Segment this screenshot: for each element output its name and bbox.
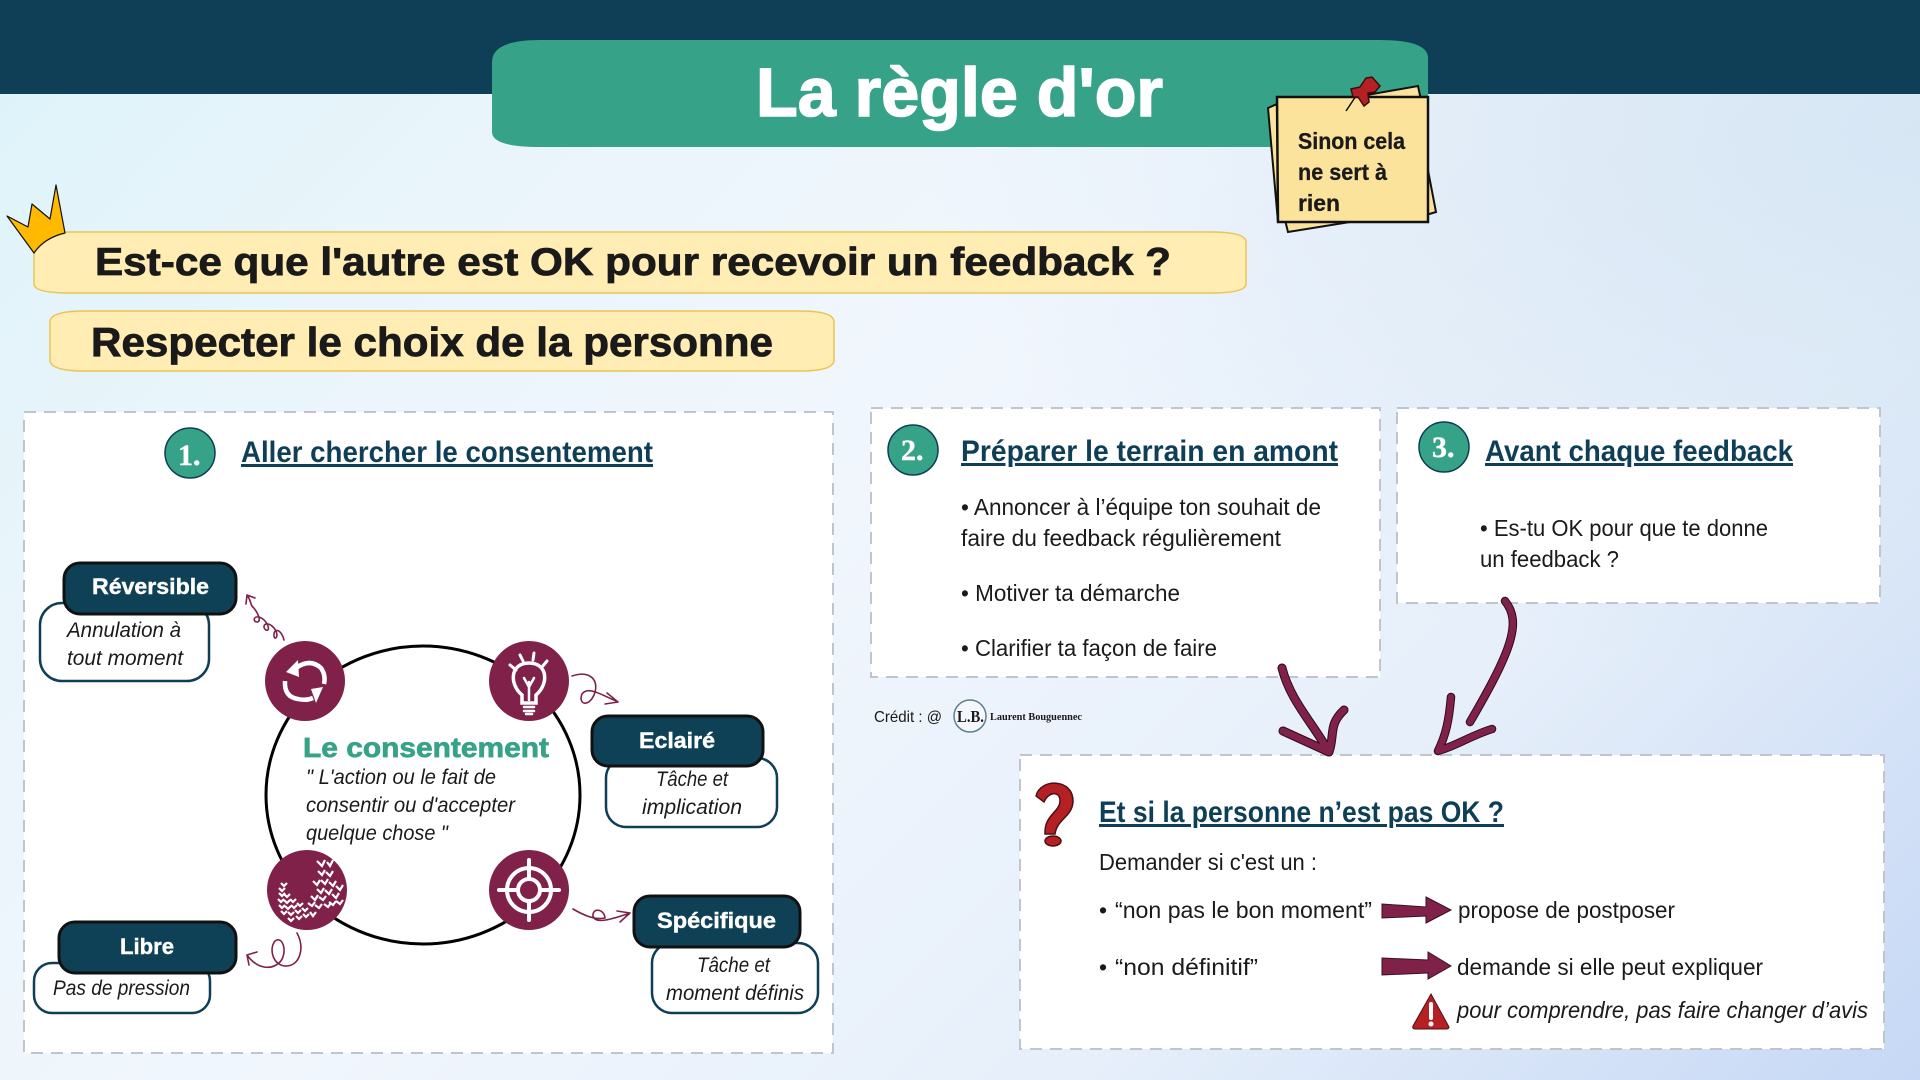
tag: Spécifique	[634, 896, 818, 1013]
heading: question: Est-ce que l'autre est OK pour recevoir un feedback ?	[95, 241, 1171, 284]
heading 1: Aller chercher le consentement	[241, 436, 653, 469]
number badge 3: 3.	[1432, 431, 1454, 464]
icon: birds	[267, 850, 347, 930]
icon: warning	[1413, 994, 1449, 1029]
intro text: Demander si c'est un :	[1099, 849, 1317, 875]
bullet list: faire du feedback régulièrement	[961, 525, 1282, 551]
arrow: to Spécifique	[573, 909, 630, 922]
tag: Libre	[34, 922, 236, 1013]
option 2	[1099, 952, 1763, 980]
arrow: to Libre	[247, 933, 301, 967]
option 1	[1099, 897, 1675, 923]
tag: Eclairé: Eclairé	[639, 728, 715, 753]
consent definition: consentir ou d'accepter	[306, 794, 516, 817]
title banner	[492, 40, 1428, 147]
number badge 1: 1.	[178, 439, 200, 472]
tag: Spécifique: moment définis	[666, 982, 804, 1005]
question text	[1480, 515, 1768, 572]
number badge 1	[165, 428, 215, 478]
arrow: panel 2 to panel 4	[1282, 668, 1344, 752]
tag: Réversible	[40, 563, 236, 681]
heading: respect choice	[50, 311, 834, 371]
panel 3: before each feedback	[1397, 408, 1880, 603]
arrow: to Réversible	[246, 595, 284, 640]
top band	[0, 0, 1920, 94]
title banner: La règle d'or	[756, 54, 1163, 131]
option 2: “non définitif”	[1115, 954, 1258, 980]
sticky note: rien	[1298, 190, 1340, 216]
sticky note	[1268, 77, 1436, 232]
consent definition	[306, 766, 516, 845]
question text: un feedback ?	[1480, 546, 1619, 572]
heading 2: Préparer le terrain en amont	[961, 435, 1338, 468]
panel 1: consent	[24, 412, 833, 1053]
consent definition: " L'action ou le fait de	[306, 766, 496, 789]
bullet list	[961, 494, 1321, 661]
heading 3: Avant chaque feedback	[1485, 435, 1793, 468]
tag: Libre: Pas de pression	[53, 977, 190, 1000]
bullet list: • Clarifier ta façon de faire	[961, 635, 1217, 661]
consent circle	[266, 646, 580, 944]
icon: target	[489, 850, 569, 930]
heading: question	[34, 232, 1246, 293]
icon: crown	[7, 185, 65, 253]
option 2: •	[1099, 954, 1107, 980]
tag: Eclairé	[592, 716, 777, 827]
credit: L.B.	[957, 707, 984, 726]
sticky note: Sinon cela	[1298, 128, 1405, 154]
sticky note: ne sert à	[1298, 159, 1387, 185]
number badge 2	[888, 425, 938, 475]
option 1: propose de postposer	[1458, 897, 1675, 923]
heading 4: Et si la personne n’est pas OK ?	[1099, 796, 1504, 829]
icon: bulb	[489, 641, 569, 721]
bullet list: • Motiver ta démarche	[961, 580, 1180, 606]
panel 4: if not OK	[1020, 755, 1884, 1049]
tag: Réversible: Annulation à	[65, 619, 181, 642]
tag: Libre: Libre	[120, 934, 174, 959]
icon: question mark	[1036, 783, 1073, 846]
note: pour comprendre, pas faire changer d’avis	[1456, 997, 1868, 1023]
tag: Eclairé: implication	[642, 796, 742, 819]
arrow: to Eclairé	[572, 674, 618, 704]
panel 2: prepare	[871, 408, 1380, 677]
consent definition: quelque chose "	[306, 822, 449, 845]
number badge 3	[1419, 422, 1469, 472]
bullet list: • Annoncer à l’équipe ton souhait de	[961, 494, 1321, 520]
tag: Eclairé: Tâche et	[656, 768, 729, 791]
credit: Crédit : @	[874, 709, 942, 726]
tag: Réversible: Réversible	[92, 574, 209, 599]
consent heading: Le consentement	[303, 732, 549, 763]
option 1: •	[1099, 897, 1107, 923]
icon: reversible	[265, 641, 345, 721]
number badge 2: 2.	[901, 434, 924, 467]
option 1: “non pas le bon moment”	[1115, 897, 1372, 923]
tag: Spécifique: Tâche et	[697, 954, 771, 977]
tag: Spécifique: Spécifique	[657, 908, 776, 933]
tag: Réversible: tout moment	[67, 647, 184, 670]
heading: respect choice: Respecter le choix de la personne	[91, 319, 773, 365]
credit	[874, 700, 1082, 732]
question text: • Es-tu OK pour que te donne	[1480, 515, 1768, 541]
option 2: demande si elle peut expliquer	[1457, 954, 1763, 980]
arrow: panel 3 to panel 4	[1438, 601, 1513, 751]
icon: pin	[1346, 77, 1380, 111]
credit: Laurent Bouguennec	[990, 712, 1082, 723]
